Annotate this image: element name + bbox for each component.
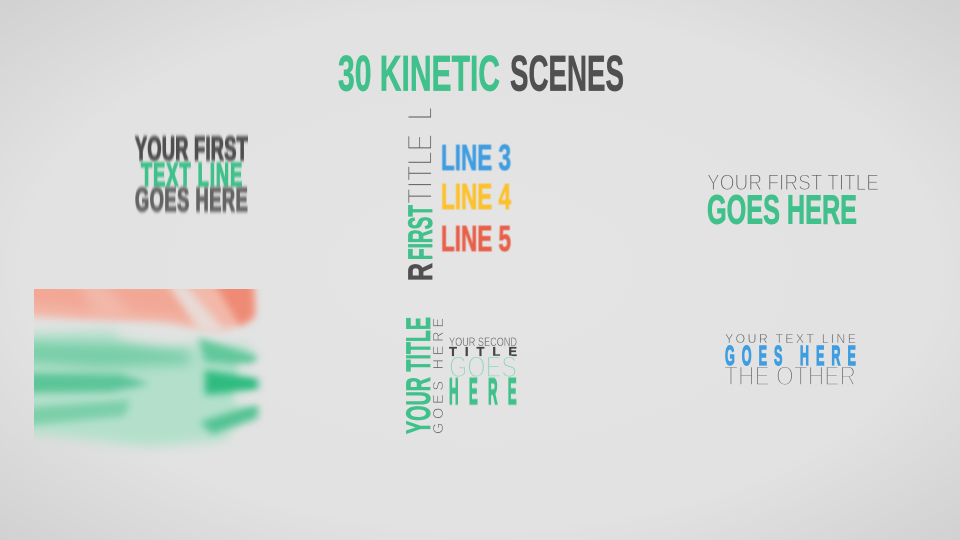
line 4: LINE 4 xyxy=(441,176,511,217)
red band xyxy=(34,289,260,334)
goes: GOES xyxy=(449,351,517,384)
your second: YOUR SECOND xyxy=(449,337,517,349)
blue line: GOES HERE xyxy=(725,339,856,371)
vertical your title: YOUR TITLE xyxy=(400,317,438,434)
here: HERE xyxy=(449,371,517,412)
bold heading: GOES HERE xyxy=(707,186,857,232)
vertical title xyxy=(401,107,440,281)
line 5: LINE 5 xyxy=(441,218,511,259)
scene: vertical title with coloured lines xyxy=(401,107,511,281)
title: 30 KINETIC xyxy=(338,46,500,102)
line 3: LINE 3 xyxy=(441,137,511,178)
scene: text line the other xyxy=(724,332,856,391)
title: TITLE xyxy=(449,344,517,359)
vertical title: L xyxy=(401,107,440,120)
thin line: YOUR TEXT LINE xyxy=(725,332,856,346)
scene: first title goes here xyxy=(707,170,879,232)
scene: motion blurred text block: YOUR FIRST xyxy=(135,130,248,167)
green bands xyxy=(20,325,268,447)
vertical title: TITLE xyxy=(401,134,440,204)
scene: motion blurred text block xyxy=(135,130,248,218)
scene: motion blurred text block: GOES HERE xyxy=(135,181,248,218)
scene: blurred colour blotch xyxy=(34,289,264,452)
scene: stacked title block xyxy=(400,317,517,434)
scene: motion blurred text block: TEXT LINE xyxy=(141,156,242,193)
vertical title: R xyxy=(402,263,440,281)
thin large line: THE OTHER xyxy=(724,361,856,391)
title: SCENES xyxy=(510,46,624,102)
vertical title: FIRST xyxy=(402,205,440,260)
vertical goes here: GOES HERE xyxy=(431,318,447,434)
thin heading: YOUR FIRST TITLE xyxy=(707,170,879,195)
